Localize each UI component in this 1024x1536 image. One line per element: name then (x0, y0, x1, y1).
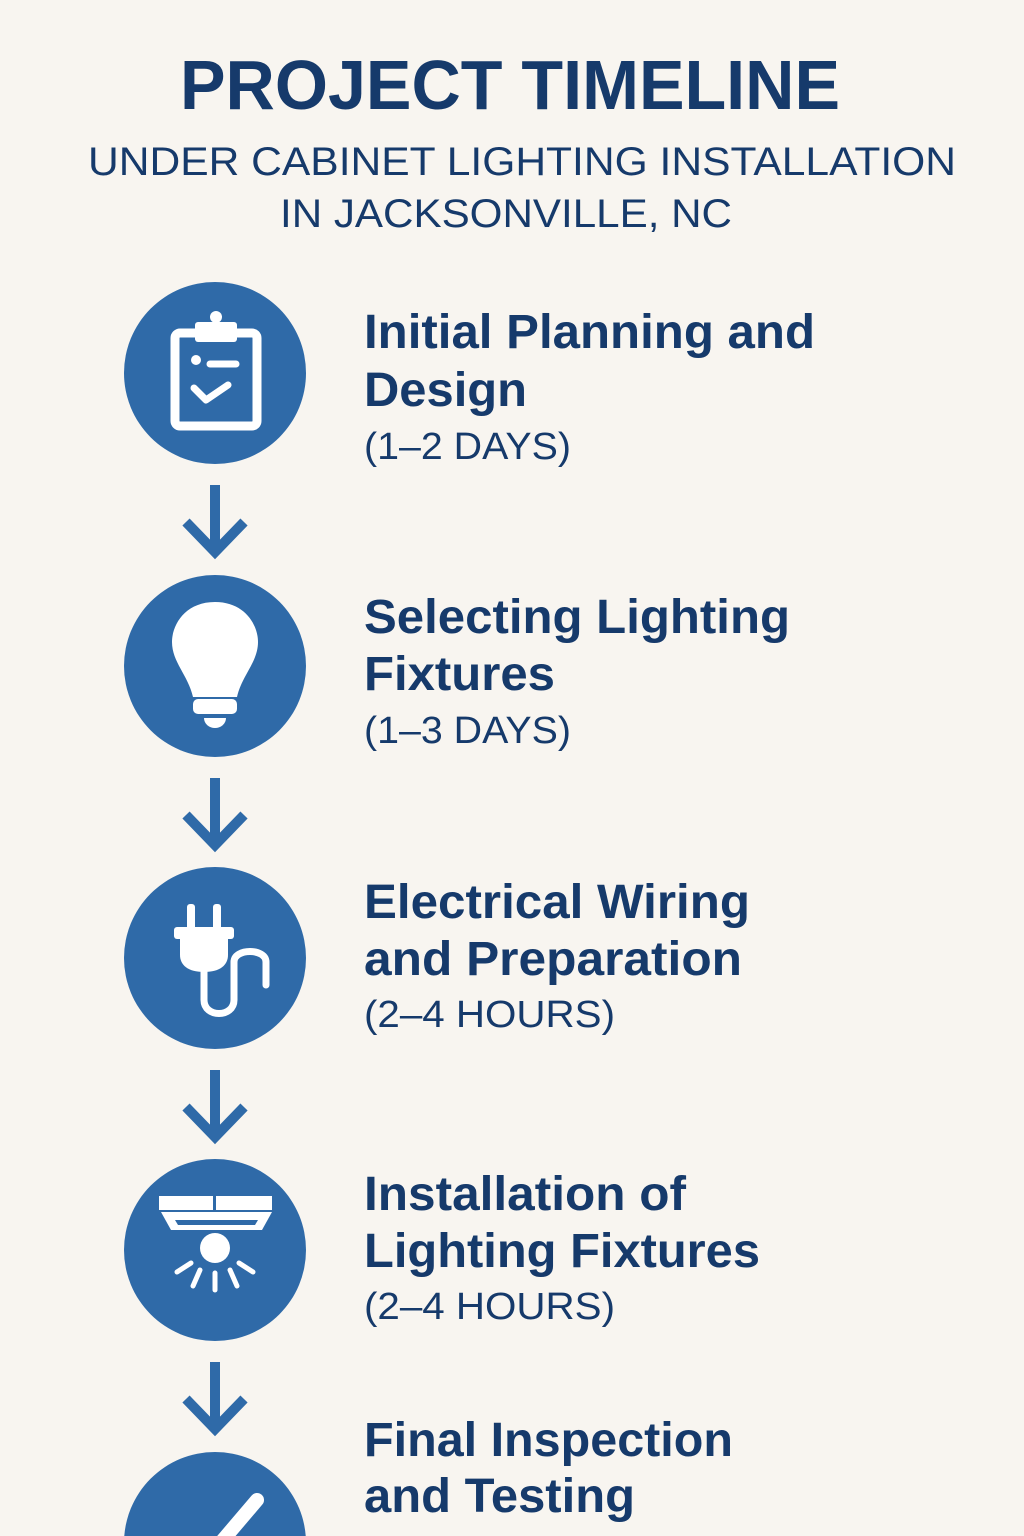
step 5 text (364, 1414, 733, 1536)
step 1 text (364, 306, 815, 468)
icon: plug (124, 867, 306, 1049)
step 2 text (364, 591, 790, 752)
icon: check (124, 1452, 306, 1536)
step 3 text: and Preparation (364, 933, 742, 986)
step 1 text: (1–2 DAYS) (364, 426, 571, 468)
step 3 text: (2–4 HOURS) (364, 994, 615, 1036)
step 2 text: (1–3 DAYS) (364, 710, 571, 752)
step 3 text (364, 876, 750, 1036)
subtitle (88, 140, 956, 236)
step 1 text: Design (364, 364, 527, 417)
icon: cabinet light (124, 1159, 306, 1341)
step 2 text: Fixtures (364, 648, 555, 701)
arrow 3 (186, 1070, 244, 1137)
subtitle: IN JACKSONVILLE, NC (280, 192, 732, 236)
step 1 text: Initial Planning and (364, 306, 815, 359)
step 3 text: Electrical Wiring (364, 876, 750, 929)
step 4 text (364, 1168, 760, 1328)
step 4 text: Installation of (364, 1168, 687, 1221)
step 2 text: Selecting Lighting (364, 591, 790, 644)
arrow 2 (186, 778, 244, 845)
step 4 text: (2–4 HOURS) (364, 1286, 615, 1328)
arrow 4 (186, 1362, 244, 1429)
icon: light bulb (124, 575, 306, 757)
icon: clipboard (124, 282, 306, 464)
step 5 text: Final Inspection (364, 1414, 733, 1467)
step 5 text: and Testing (364, 1470, 635, 1523)
title: PROJECT TIMELINE (180, 46, 840, 124)
step 4 text: Lighting Fixtures (364, 1225, 760, 1278)
subtitle: UNDER CABINET LIGHTING INSTALLATION (88, 140, 956, 184)
arrow 1 (186, 485, 244, 552)
